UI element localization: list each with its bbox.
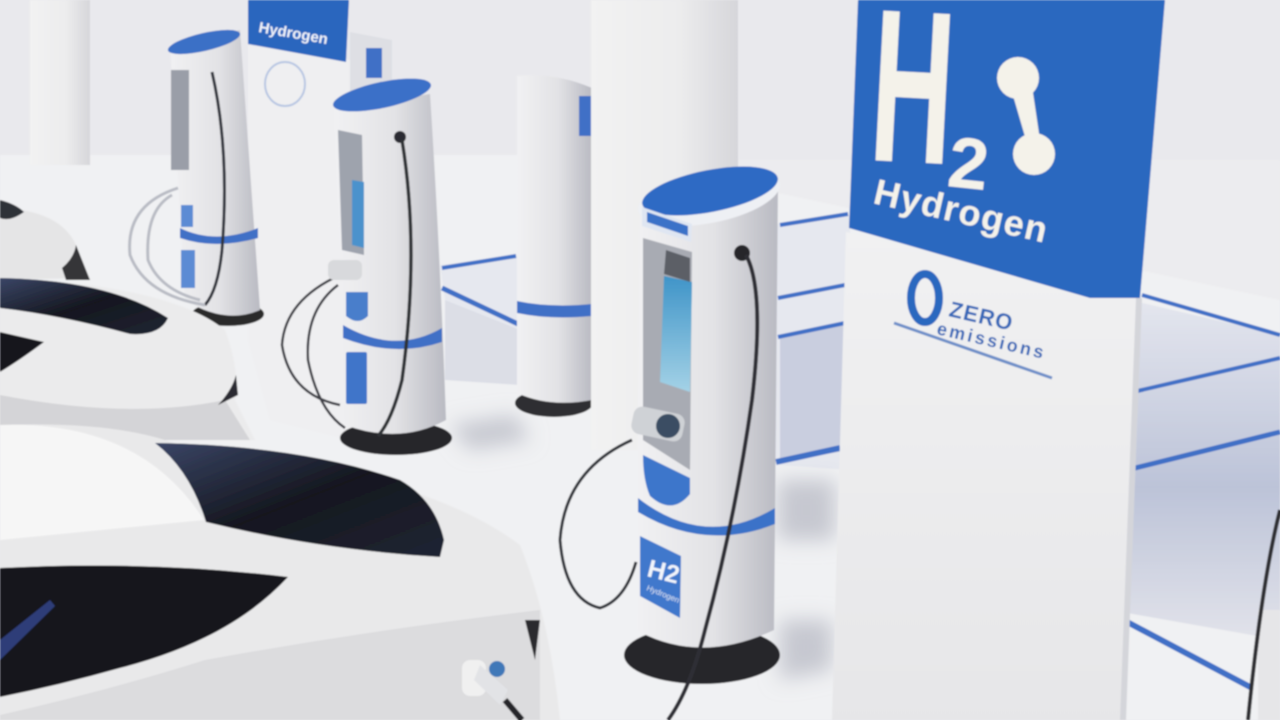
car side window — [0, 565, 288, 697]
molecule icon — [997, 57, 1055, 175]
right edge cable — [1248, 510, 1280, 720]
car: middle — [0, 278, 255, 440]
pump blue band — [638, 498, 775, 536]
pump cables — [668, 255, 757, 720]
car windscreen — [155, 443, 444, 557]
fuel connector — [462, 660, 522, 720]
sign pillar — [832, 232, 1140, 720]
pump: front — [560, 157, 785, 720]
floor shadows — [450, 415, 835, 680]
zero emissions logo — [894, 274, 1052, 378]
pump blue cap — [633, 157, 785, 236]
pump body — [636, 178, 778, 648]
large white column — [591, 0, 738, 450]
back sign pillar: Hydrogen — [257, 19, 329, 48]
pump H2 panel: H2 — [645, 555, 682, 590]
pump base — [624, 626, 780, 684]
back sign pillar — [248, 0, 392, 440]
car: front — [0, 424, 560, 720]
pump: far — [130, 25, 264, 326]
pump H2 panel — [640, 536, 682, 618]
floor: blue parking bays — [440, 214, 1280, 688]
back cylinder column — [515, 75, 593, 417]
cars parked on the left — [0, 200, 560, 720]
pump screen — [643, 238, 692, 470]
pump nozzle — [630, 405, 686, 443]
pump: middle — [282, 72, 452, 455]
zero emissions logo: emissions — [935, 318, 1048, 363]
main hydrogen sign: 2 — [944, 122, 993, 206]
pump blue badge — [643, 455, 690, 506]
pump H2 panel: Hydrogen — [645, 584, 681, 605]
zero emissions logo: ZERO — [947, 297, 1016, 336]
Hydrogen label: Hydrogen — [870, 171, 1052, 251]
car: rear — [0, 200, 90, 280]
sign blue panel — [849, 0, 1165, 298]
main hydrogen sign — [832, 0, 1165, 720]
car body — [0, 424, 560, 720]
